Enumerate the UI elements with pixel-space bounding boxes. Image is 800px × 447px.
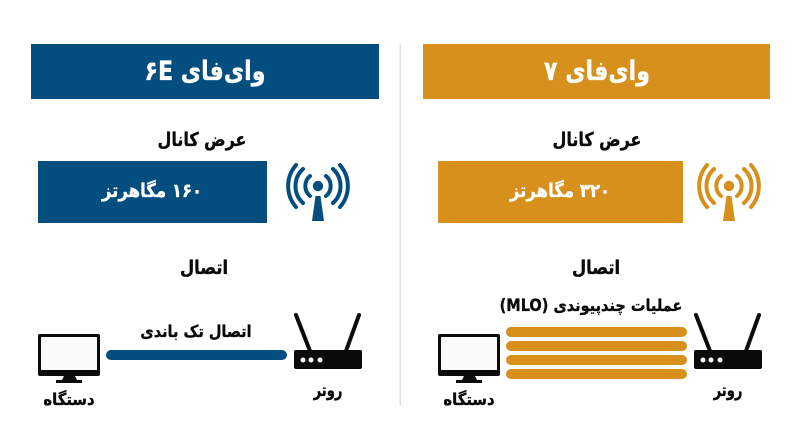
link: single band (106, 350, 287, 360)
label: device: دستگاه (443, 389, 495, 409)
heading: Wi-Fi 7: وای‌فای ۷ (544, 55, 650, 88)
bar: 320 MHz (438, 161, 683, 223)
label: channel width: عرض کانال (158, 130, 246, 151)
panel: Wi-Fi 6E (31, 44, 379, 409)
label: single band connection: اتصال تک باندی (140, 322, 252, 341)
icon: device monitor (438, 334, 500, 383)
label: device: دستگاه (43, 389, 95, 409)
links: four MLO bands (506, 327, 687, 379)
heading: Wi-Fi 7 (423, 44, 770, 99)
bar: 320 MHz: ۳۲۰ مگاهرتز (509, 179, 610, 202)
label: multi-link operation: عملیات چندپیوندی (MLO) (500, 296, 682, 316)
label: channel width: عرض کانال (553, 130, 641, 151)
icon: antenna gold (699, 165, 759, 221)
bar: 160 MHz (38, 161, 267, 223)
panel: Wi-Fi 7 (423, 44, 770, 409)
heading: Wi-Fi 6E (31, 44, 379, 99)
label: router: روتر (313, 380, 342, 401)
label: connection: اتصال (572, 258, 620, 279)
icon: antenna blue (288, 165, 348, 221)
icon: router (294, 315, 362, 369)
icon: device monitor (38, 334, 100, 383)
label: connection: اتصال (180, 258, 228, 279)
bar: 160 MHz: ۱۶۰ مگاهرتز (101, 179, 202, 202)
icon: router (694, 315, 762, 369)
label: router: روتر (713, 380, 742, 401)
heading: Wi-Fi 6E: وای‌فای ۶E (144, 55, 266, 88)
